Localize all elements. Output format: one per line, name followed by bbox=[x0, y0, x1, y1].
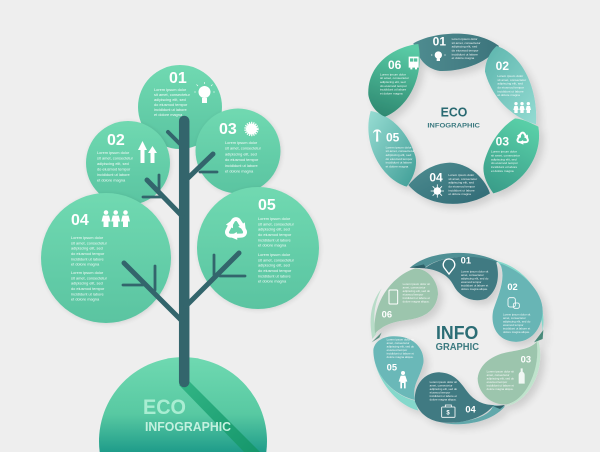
text block 04a: et dolore magna bbox=[71, 262, 100, 267]
leaf circle 05 bbox=[197, 187, 319, 309]
text 04: et dolore magna bbox=[448, 192, 471, 196]
number 06: 06 bbox=[382, 310, 392, 320]
text 01: adipiscing elit, sed bbox=[452, 45, 477, 49]
title: ECO INFOGRAPHIC: ECO bbox=[143, 396, 186, 419]
text 02: incididunt ut labore et bbox=[503, 326, 530, 330]
text 03: sit amet, consectetur bbox=[491, 153, 520, 157]
number 02: 02 bbox=[496, 59, 509, 73]
text block 02: et dolore magna bbox=[97, 178, 126, 182]
text 05: adipiscing elit, sed do bbox=[387, 344, 414, 348]
text 03: adipiscing elit, sed do bbox=[487, 376, 514, 380]
text 04: Lorem ipsum dolor bbox=[448, 173, 474, 177]
text block 04a: incididunt ut labore bbox=[71, 256, 104, 261]
ring title: ECO bbox=[441, 105, 467, 120]
title: ECO INFOGRAPHIC: INFOGRAPHIC bbox=[145, 419, 232, 434]
text 03: incididunt ut labore bbox=[491, 165, 517, 169]
text 05: do eiusmod tempor bbox=[386, 157, 412, 161]
text 01: Lorem ipsum dolor sit bbox=[461, 269, 489, 273]
tree trunk and branches bbox=[123, 121, 245, 382]
text 01: amet, consectetur bbox=[461, 273, 484, 277]
text 06: Lorem ipsum dolor sit bbox=[403, 282, 430, 286]
text 06: adipiscing elit, sed do bbox=[403, 289, 430, 293]
text block 05a: adipiscing elit, sed bbox=[258, 227, 290, 232]
text block 01: et dolore magna bbox=[154, 112, 183, 117]
text block 02: sit amet, consectetur bbox=[97, 156, 134, 160]
text block 01: incididunt ut labore bbox=[154, 107, 187, 112]
text 03: amet, consectetur bbox=[487, 373, 509, 377]
text 04: do eiusmod tempor bbox=[448, 184, 475, 188]
text 05: dolore magna aliqua. bbox=[387, 355, 414, 359]
leaf circle 01 bbox=[138, 65, 222, 149]
text block 04b: sit amet, consectetur bbox=[71, 275, 108, 280]
drop 04 bbox=[415, 372, 494, 423]
text 04: eiusmod tempor bbox=[430, 390, 450, 394]
drop 01 bbox=[425, 256, 498, 300]
icon: up arrows bbox=[138, 141, 157, 163]
icon: bulb bbox=[431, 51, 446, 61]
text 05: et dolore magna bbox=[386, 164, 409, 168]
number 01: 01 bbox=[433, 35, 446, 49]
text 02: et dolore magna bbox=[497, 93, 520, 97]
text 02: adipiscing elit, sed bbox=[497, 82, 523, 86]
text block 03: adipiscing elit, sed bbox=[225, 151, 257, 156]
text 01: Lorem ipsum dolor bbox=[452, 37, 478, 41]
text 06: dolore magna aliqua. bbox=[403, 299, 430, 303]
text 03: incididunt ut labore et bbox=[487, 383, 514, 387]
icon: sun bbox=[431, 184, 444, 198]
petal 01 bbox=[413, 34, 499, 71]
icon: light bulb bbox=[194, 82, 215, 103]
text 04: amet, consectetur bbox=[430, 383, 452, 387]
title: ECO INFOGRAPHIC bbox=[143, 396, 232, 434]
number 04: 04 bbox=[465, 404, 477, 414]
number 02: 02 bbox=[107, 132, 125, 149]
text 02: eiusmod tempor bbox=[503, 323, 524, 327]
text block 01: adipiscing elit, sed bbox=[154, 97, 186, 102]
text 01: adipiscing elit, sed do bbox=[461, 276, 489, 280]
text 03: adipiscing elit, sed bbox=[491, 157, 517, 161]
text 03: Lorem ipsum dolor sit bbox=[487, 369, 514, 373]
petal 04 bbox=[408, 163, 490, 204]
icon: recycle bbox=[515, 133, 530, 146]
petal 02 bbox=[485, 46, 536, 124]
text 06: incididunt ut labore et bbox=[403, 296, 430, 300]
number 03: 03 bbox=[521, 354, 531, 364]
ring title: INFO bbox=[436, 322, 478, 343]
text 03: do eiusmod tempor bbox=[491, 161, 518, 165]
number 01: 01 bbox=[461, 256, 471, 266]
text block 04b: do eiusmod tempor bbox=[71, 286, 105, 291]
icon: bus bbox=[409, 57, 419, 69]
drop 06 bbox=[375, 268, 438, 333]
number 06: 06 bbox=[388, 58, 402, 72]
number 05: 05 bbox=[386, 131, 400, 145]
text block 03: Lorem ipsum dolor bbox=[225, 140, 258, 145]
panel: eco leaf ring bbox=[368, 34, 539, 204]
drop 02 bbox=[492, 263, 543, 342]
text 05: Lorem ipsum dolor sit bbox=[387, 337, 414, 341]
text 03: et dolore magna bbox=[491, 169, 514, 173]
petal 06 bbox=[368, 44, 420, 117]
text block 03: do eiusmod tempor bbox=[225, 157, 259, 162]
text 05: incididunt ut labore bbox=[386, 161, 412, 165]
text block 02: incididunt ut labore bbox=[97, 172, 130, 177]
text 04: adipiscing elit, sed do bbox=[430, 387, 457, 391]
ring title bbox=[436, 322, 479, 353]
text 06: Lorem ipsum dolor bbox=[380, 72, 406, 76]
text block 05b: adipiscing elit, sed bbox=[258, 263, 290, 268]
text 02: dolore magna aliqua. bbox=[503, 330, 530, 334]
trunk shadow bbox=[179, 381, 260, 452]
text 03: eiusmod tempor bbox=[487, 380, 507, 384]
ground semicircle bbox=[99, 357, 267, 452]
drop 03 bbox=[478, 342, 537, 404]
text block 05b: et dolore magna bbox=[258, 279, 287, 284]
text 02: amet, consectetur bbox=[503, 316, 526, 320]
text block 05a: incididunt ut labore bbox=[258, 237, 291, 242]
text block 02: adipiscing elit, sed bbox=[97, 161, 129, 166]
text block 01: Lorem ipsum dolor bbox=[154, 87, 187, 92]
icon: people bbox=[513, 102, 531, 113]
text block 03: incididunt ut labore bbox=[225, 163, 258, 168]
text 04: incididunt ut labore et bbox=[430, 394, 457, 398]
number 04: 04 bbox=[71, 212, 89, 229]
text 04: incididunt ut labore bbox=[448, 188, 475, 192]
text 05: amet, consectetur bbox=[387, 341, 409, 345]
icon: coins bbox=[508, 298, 519, 308]
text block 03: sit amet, consectetur bbox=[225, 146, 262, 151]
text 05: Lorem ipsum dolor bbox=[386, 145, 412, 149]
text 05: eiusmod tempor bbox=[387, 348, 407, 352]
text 06: et dolore magna bbox=[380, 91, 403, 95]
text 03: Lorem ipsum dolor bbox=[491, 150, 517, 154]
text block 04b: adipiscing elit, sed bbox=[71, 281, 103, 286]
text 02: sit amet, consectetur bbox=[497, 78, 526, 82]
text 04: adipiscing elit, sed bbox=[448, 181, 474, 185]
text 06: incididunt ut labore bbox=[380, 88, 406, 92]
number 04: 04 bbox=[429, 170, 443, 184]
text 01: sit amet, consectetur bbox=[452, 41, 481, 45]
text 02: adipiscing elit, sed do bbox=[503, 319, 531, 323]
text 04: dolore magna aliqua. bbox=[430, 397, 457, 401]
text block 05a: do eiusmod tempor bbox=[258, 232, 292, 237]
text 01: incididunt ut labore et bbox=[461, 283, 488, 287]
text 01: dolore magna aliqua. bbox=[461, 287, 488, 291]
icon: location pin bbox=[443, 259, 455, 274]
text 06: adipiscing elit, sed bbox=[380, 80, 406, 84]
text 04: sit amet, consectetur bbox=[448, 177, 477, 181]
text 06: sit amet, consectetur bbox=[380, 76, 409, 80]
text 02: incididunt ut labore bbox=[497, 89, 524, 93]
text block 04a: sit amet, consectetur bbox=[71, 240, 108, 245]
text block 04b: et dolore magna bbox=[71, 297, 100, 302]
leaf petals with shadow bbox=[368, 34, 539, 204]
text block 05b: do eiusmod tempor bbox=[258, 268, 292, 273]
text 01: incididunt ut labore bbox=[452, 52, 478, 56]
text block 04b: incididunt ut labore bbox=[71, 291, 104, 296]
text block 02: Lorem ipsum dolor bbox=[97, 150, 130, 155]
text block 05b: sit amet, consectetur bbox=[258, 257, 295, 262]
text 06: amet, consectetur bbox=[403, 285, 425, 289]
text 05: adipiscing elit, sed bbox=[386, 153, 411, 157]
number 02: 02 bbox=[507, 282, 518, 292]
text 02: do eiusmod tempor bbox=[497, 85, 524, 89]
number 03: 03 bbox=[219, 121, 237, 138]
icon: palm tree bbox=[373, 129, 381, 142]
icon: dollar case: $ bbox=[446, 411, 450, 417]
text block 04a: adipiscing elit, sed bbox=[71, 246, 103, 251]
number 05: 05 bbox=[387, 362, 397, 372]
text block 05a: et dolore magna bbox=[258, 243, 287, 248]
ring title bbox=[427, 105, 480, 130]
text block 04a: Lorem ipsum dolor bbox=[71, 235, 104, 240]
icon: three people bbox=[102, 210, 130, 227]
drop 05 bbox=[373, 336, 424, 400]
text block 01: sit amet, consectetur bbox=[154, 92, 191, 97]
petal 05 bbox=[368, 111, 416, 187]
text 05: sit amet, consectetur bbox=[386, 149, 415, 153]
leaf circle 03 bbox=[196, 108, 280, 194]
text block 04a: do eiusmod tempor bbox=[71, 251, 105, 256]
text 01: et dolore magna bbox=[452, 56, 475, 60]
number 03: 03 bbox=[496, 135, 509, 149]
text block 01: do eiusmod tempor bbox=[154, 102, 188, 107]
icon: gear flower bbox=[245, 123, 258, 135]
text 06: eiusmod tempor bbox=[403, 292, 423, 296]
text 02: Lorem ipsum dolor sit bbox=[503, 312, 531, 316]
text block 05a: Lorem ipsum dolor bbox=[258, 216, 291, 221]
text block 04b: Lorem ipsum dolor bbox=[71, 270, 104, 275]
panel: tree infographic bbox=[41, 65, 319, 452]
number 01: 01 bbox=[169, 70, 187, 87]
ring title: GRAPHIC bbox=[436, 342, 479, 353]
leaf circle 04 bbox=[41, 193, 171, 323]
drops with shadow bbox=[371, 253, 544, 424]
text 05: incididunt ut labore et bbox=[387, 351, 414, 355]
leaf circle 02 bbox=[86, 121, 170, 205]
panel: info drop ring bbox=[371, 253, 544, 424]
text 06: do eiusmod tempor bbox=[380, 84, 407, 88]
number 05: 05 bbox=[258, 197, 276, 214]
ring title: INFOGRAPHIC bbox=[427, 123, 480, 130]
text block 03: et dolore magna bbox=[225, 168, 254, 174]
text 01: do eiusmod tempor bbox=[452, 48, 478, 52]
text block 05b: Lorem ipsum dolor bbox=[258, 252, 291, 257]
icon: phone bbox=[389, 290, 398, 304]
text block 02: do eiusmod tempor bbox=[97, 166, 131, 172]
text block 05a: sit amet, consectetur bbox=[258, 221, 295, 226]
text 04: Lorem ipsum dolor sit bbox=[430, 380, 457, 384]
icon: recycle bbox=[222, 219, 249, 243]
text 01: eiusmod tempor bbox=[461, 280, 482, 284]
petal 03 bbox=[483, 118, 539, 193]
text 02: Lorem ipsum dolor bbox=[497, 74, 523, 78]
outer bands bbox=[371, 253, 544, 424]
icon: person bbox=[399, 371, 407, 388]
text block 05b: incididunt ut labore bbox=[258, 273, 291, 278]
icon: bottle bbox=[519, 368, 525, 384]
text 03: dolore magna aliqua. bbox=[487, 387, 514, 391]
connectors bbox=[372, 264, 543, 409]
